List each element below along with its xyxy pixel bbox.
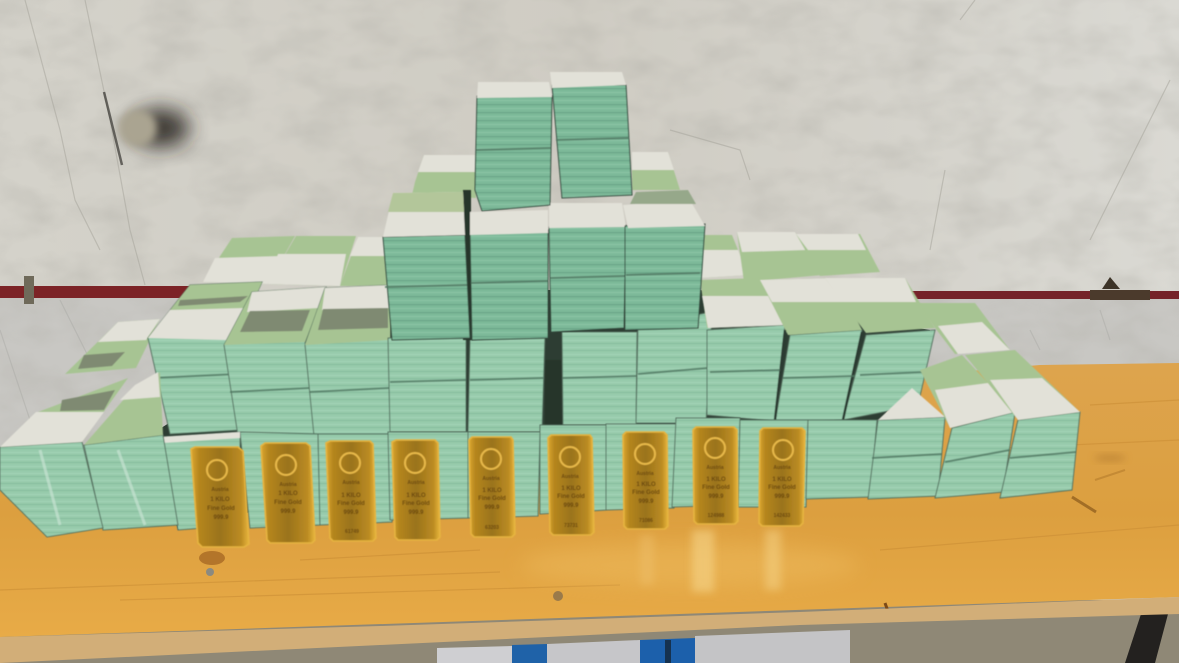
gold bar 8: 999.9 <box>708 494 724 500</box>
gold bar 1: Austria <box>211 487 229 493</box>
gold bar 4 <box>392 440 440 540</box>
right front stack <box>920 355 1015 498</box>
floor and boxes under table <box>0 600 1179 663</box>
back right stacks <box>737 232 1010 354</box>
upper stack fourth <box>623 190 705 330</box>
gold bar 8: 1 KILO <box>706 477 726 483</box>
back centre stacks <box>412 152 748 278</box>
left stack two <box>224 287 326 436</box>
right base stacks <box>806 388 945 499</box>
gold bar 8: 124988 <box>708 513 725 519</box>
gold bar 5: 999.9 <box>484 505 500 511</box>
upper stack left <box>383 192 470 340</box>
gold bar 9: Austria <box>773 465 791 471</box>
gold bar 1: 1 KILO <box>210 497 230 503</box>
gold bar 8: Austria <box>706 465 724 471</box>
left stack one <box>148 282 262 434</box>
gold bar 5: Fine Gold <box>478 496 506 502</box>
gold bar 3: 61749 <box>345 529 359 535</box>
gold bar 1 <box>191 447 249 547</box>
gold bar 9 <box>759 428 805 526</box>
gold bar 2: 999.9 <box>280 509 296 515</box>
gold bar 5: Austria <box>482 476 500 482</box>
gold bar 9: 142433 <box>774 513 791 519</box>
gold bar 5: 1 KILO <box>482 488 502 494</box>
gold bar 8: Fine Gold <box>702 485 730 491</box>
middle banknote stacks <box>148 278 935 436</box>
front row of banknote stacks <box>0 350 1080 537</box>
left stack three <box>305 285 392 436</box>
gold bar 6: 999.9 <box>563 503 579 509</box>
gold bar 8 <box>693 427 738 524</box>
gold bar 7: 999.9 <box>638 499 654 505</box>
gold bar 3: 999.9 <box>343 510 359 516</box>
gold bar 9: 999.9 <box>774 494 790 500</box>
top stack right <box>550 72 632 198</box>
right stacks middle tier <box>700 278 935 423</box>
right outer stack <box>965 350 1080 498</box>
gold bar 1: 999.9 <box>213 515 229 521</box>
gold bars <box>191 427 805 547</box>
gold bar 2 <box>261 443 315 543</box>
gold bar 9: Fine Gold <box>768 485 796 491</box>
gold bar 2: Austria <box>279 482 297 488</box>
gold bar 6: Austria <box>561 474 579 480</box>
wall scorch mark <box>104 92 190 165</box>
gold bar 4: Austria <box>407 480 425 486</box>
gold bar 2: 1 KILO <box>278 491 298 497</box>
centre base stacks <box>240 418 808 528</box>
gold bar 7: 1 KILO <box>636 482 656 488</box>
gold bar 4: 999.9 <box>408 510 424 516</box>
gold bar 4: Fine Gold <box>402 501 430 507</box>
dark backing between stacks <box>150 290 930 530</box>
wall <box>0 0 1179 506</box>
gold bar 5: 63203 <box>485 525 499 531</box>
upper stack third <box>549 203 626 332</box>
back rows of banknote stacks <box>65 152 1010 374</box>
upper pyramid of banknote stacks <box>383 72 705 340</box>
gold bar 3: Austria <box>342 480 360 486</box>
gold bar 3: 1 KILO <box>341 493 361 499</box>
left front stack <box>0 378 128 537</box>
table front edge <box>0 597 1179 663</box>
gold bar 7 <box>623 432 668 529</box>
gold bar 4: 1 KILO <box>406 493 426 499</box>
back left stack tops <box>203 236 388 286</box>
upper stack second <box>470 210 548 340</box>
gold bar 6 <box>548 435 594 535</box>
gold bar 3: Fine Gold <box>337 501 365 507</box>
gold bar 1: Fine Gold <box>207 506 235 512</box>
gold bar 6: 1 KILO <box>561 486 581 492</box>
centre lower tier <box>388 312 712 432</box>
left middle stack <box>84 372 178 530</box>
far left low stack <box>65 319 160 374</box>
gold bar 2: Fine Gold <box>274 500 302 506</box>
red pipe <box>0 276 1179 304</box>
gold bar 9: 1 KILO <box>772 477 792 483</box>
gold bar 7: 71086 <box>639 518 653 524</box>
gold bar 3 <box>326 441 376 541</box>
top stack left <box>475 82 552 211</box>
gold bar 6: 73731 <box>564 523 578 529</box>
gold bar 7: Fine Gold <box>632 490 660 496</box>
gold bar 5 <box>469 437 515 537</box>
gold bar 6: Fine Gold <box>557 494 585 500</box>
left lower stack <box>160 432 240 530</box>
gold bar 7: Austria <box>636 471 654 477</box>
table top <box>0 363 1179 637</box>
